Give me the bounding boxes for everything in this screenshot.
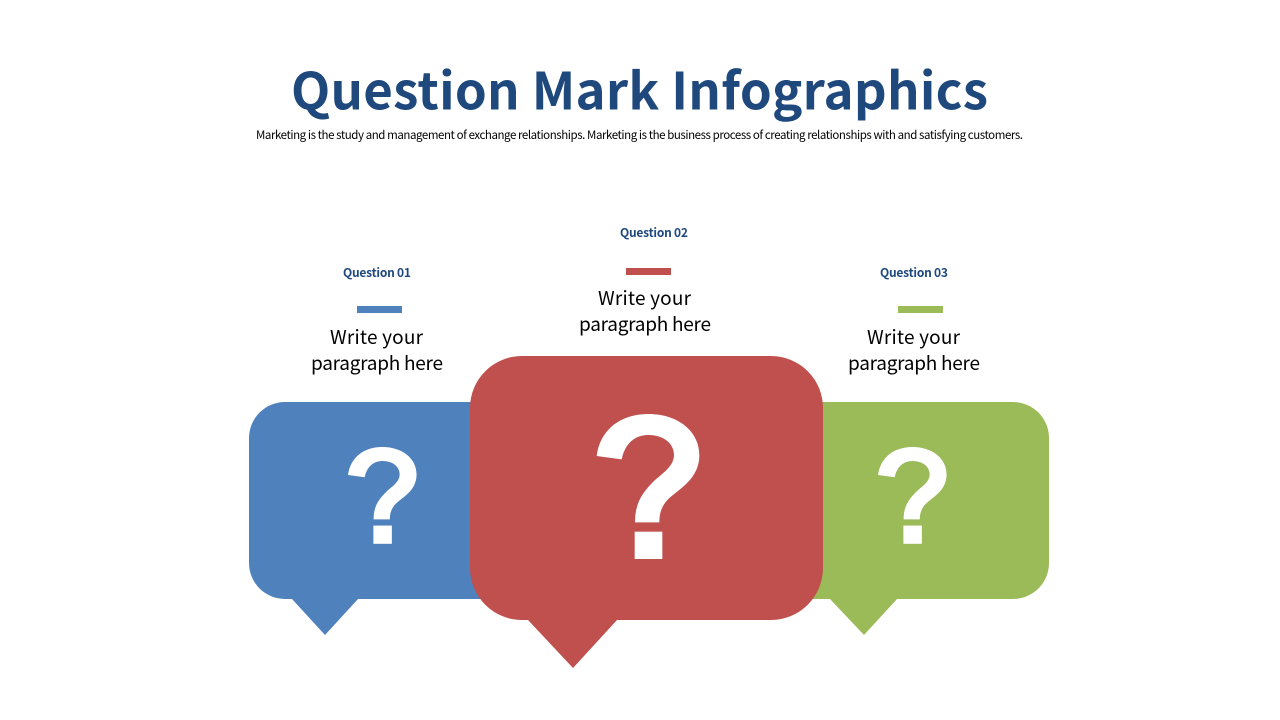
bubble: green — [780, 402, 1049, 635]
accent bar: blue — [357, 306, 402, 313]
icon: question mark blue — [348, 447, 417, 544]
text: paragraph 03: paragraph here — [848, 349, 980, 376]
accent bar: red — [626, 268, 671, 275]
text: paragraph 02: paragraph here — [579, 310, 711, 337]
heading: question 01: Question 01 — [343, 264, 411, 281]
text: paragraph 01 — [311, 323, 443, 376]
panel: question 01 text — [311, 264, 443, 376]
text: paragraph 03: Write your — [867, 323, 961, 350]
icon: question mark red — [597, 414, 699, 559]
subtitle: Marketing is the study and management of exchange relationships. Marketing is the business process of creating relationships with and satisfying customers. — [256, 127, 1023, 143]
icon: question mark green — [878, 447, 947, 544]
bubble: red — [470, 356, 823, 668]
accent bar: green — [898, 306, 943, 313]
heading: question 03: Question 03 — [880, 264, 948, 281]
panel: question 03 text — [848, 264, 980, 376]
title: Question Mark Infographics — [291, 50, 988, 124]
text: paragraph 01: Write your — [330, 323, 424, 350]
text: paragraph 03 — [848, 323, 980, 376]
text: paragraph 02: Write your — [598, 284, 692, 311]
bubble: blue — [249, 402, 520, 635]
heading: question 02: Question 02 — [620, 224, 688, 241]
panel: question 02 text — [579, 224, 711, 337]
text: paragraph 02 — [579, 284, 711, 337]
text: paragraph 01: paragraph here — [311, 349, 443, 376]
